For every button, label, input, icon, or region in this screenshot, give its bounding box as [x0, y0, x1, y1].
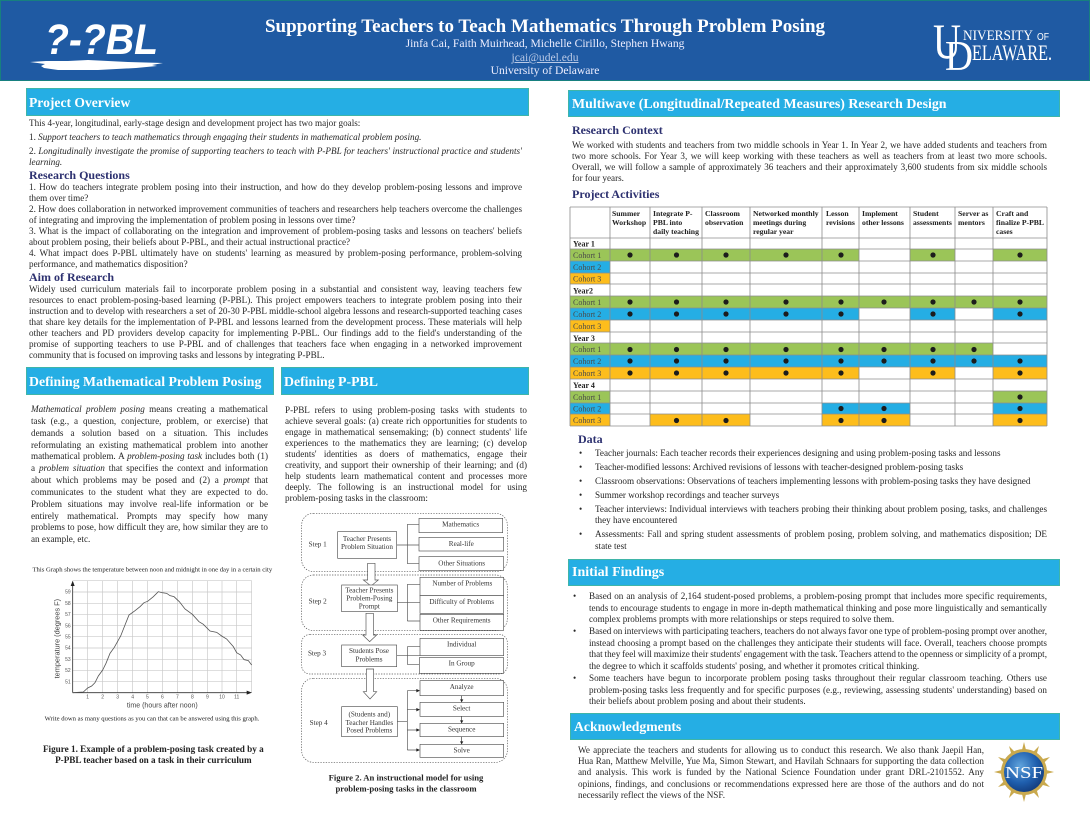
text: aim of research: Widely used curriculum materials fail to incorporate problem posing in a substantial and consistent way, leaving teachers few: [29, 284, 522, 294]
text: acknowledgments: necessarily reflect the views of the NSF.: [578, 790, 725, 800]
step 2: Problem-Posing: [346, 594, 393, 602]
text: definition of mathematical problem posing: task (e.g., a question, conjecture, problem, or exercise) that: [31, 416, 268, 426]
icon: NSF logo: [994, 742, 1054, 802]
line chart: 4: [131, 694, 134, 700]
row labels: Year 1: [573, 240, 595, 248]
panel heading: Defining Mathematical Problem Posing: [26, 367, 274, 395]
heading: Aim of Research: Aim of Research: [29, 270, 114, 284]
column headers: assessments: [913, 218, 952, 227]
list: data sources: •: [579, 448, 582, 458]
line chart: 6: [161, 694, 164, 700]
step 1: Mathematics: [442, 521, 479, 529]
figure 1 caption: P-PBL teacher based on a task in their curriculum: [55, 755, 252, 765]
step 2: Number of Problems: [432, 580, 493, 588]
list: data sources: •: [579, 490, 582, 500]
column headers: regular year: [753, 227, 794, 236]
text: definition of P-PBL: engage in mathematical sensemaking; (b) connect students' life: [285, 426, 527, 436]
list: initial findings: [573, 591, 1047, 706]
text: definition of P-PBL: [285, 404, 527, 503]
figure 2: instructional model flowchart: [301, 513, 508, 794]
row labels: Year 3: [573, 334, 595, 343]
line chart: 11: [234, 694, 239, 700]
row labels: Cohort 1: [573, 345, 601, 354]
table: project activities by year and cohort: [570, 206, 1048, 426]
column headers: revisions: [826, 218, 855, 227]
line chart: 55: [65, 634, 71, 640]
line chart: 56: [65, 623, 71, 629]
text: research context: Overall, we will follow a sample of approximately 36 teachers and their approximately 3,600 students from six middle schools: [572, 162, 1047, 172]
header band: [0, 0, 1090, 81]
text: acknowledgments: opinions, findings, and conclusions or recommendations expressed here are those of the authors and do not: [578, 779, 984, 789]
text: acknowledgments: and analysis. This work is funded by the National Science Foundation under grant DRL-2101552. Any: [578, 767, 984, 777]
step 2: Difficulty of Problems: [429, 598, 494, 606]
authors: Jinfa Cai, Faith Muirhead, Michelle Cirillo, Stephen Hwang: [406, 37, 684, 50]
text: research questions: 3. What is the impact of collaborating on the integration and improvement of problem-posing tasks and lessons on teachers' beliefs: [29, 226, 522, 236]
figure 2 caption: problem-posing tasks in the classroom: [335, 783, 477, 793]
column headers: [612, 209, 1044, 236]
text: definition of mathematical problem posing: communicates to the student what they are expected to do.: [31, 487, 268, 497]
step 3: Students Pose: [349, 647, 389, 655]
column headers: Craft and: [996, 209, 1029, 218]
list: data sources: Classroom observations: Observations of teachers implementing lessons with problem-posing tasks they have designed: [595, 476, 1030, 486]
list: data sources: Teacher interviews: Individual interviews with teachers probing their thinking about problem posing, tasks, and challenges: [595, 504, 1047, 514]
line chart: 59: [65, 590, 71, 596]
step 1: [309, 518, 504, 570]
text: definition of mathematical problem posing: an example, etc.: [31, 534, 90, 544]
text: research questions: performance, and mathematics disposition?: [29, 258, 188, 268]
panel heading: Defining Mathematical Problem Posing: Defining Mathematical Problem Posing: [29, 374, 261, 389]
graph instruction: Write down as many questions as you can that can be answered using this graph.: [45, 716, 260, 723]
step 4: Step 4: [310, 719, 328, 727]
text: definition of mathematical problem posing: entirely mathematical. Prompts may specify how many: [31, 511, 268, 521]
panel heading: Project Overview: Project Overview: [29, 95, 130, 110]
text: acknowledgments: We appreciate the teachers and students for allowing us to conduct this research. We also thank Jaepil Han,: [578, 745, 984, 755]
step 4: Analyze: [450, 683, 474, 691]
arrow: step 2 to step 3: [363, 613, 377, 642]
text: research context: [572, 140, 1047, 183]
list: data sources: they have encountered: [595, 514, 677, 524]
step 4: Posed Problems: [346, 727, 393, 735]
line chart: 57: [65, 612, 71, 618]
list: initial findings: •: [573, 591, 576, 601]
step 3: [308, 638, 504, 673]
row labels: [573, 240, 601, 425]
column headers: PBL into: [653, 218, 682, 227]
row labels: Cohort 3: [573, 274, 601, 284]
step 3: Individual: [447, 641, 476, 649]
column headers: Student: [913, 209, 939, 218]
text: definition of mathematical problem posing: problems to pose, how difficult they are, how similar they are to: [31, 522, 268, 532]
column headers: observation: [705, 218, 744, 227]
heading: Research Questions: Research Questions: [29, 168, 130, 182]
row labels: Cohort 2: [573, 404, 601, 414]
step 2: [309, 577, 504, 630]
step 1: Teacher Presents: [343, 535, 391, 543]
step 2: Step 2: [309, 597, 327, 605]
column headers: finalize P-PBL: [996, 218, 1044, 227]
graph prompt: This Graph shows the temperature between noon and midnight in one day in a certain city: [32, 567, 273, 574]
text: acknowledgments: [578, 745, 984, 800]
column headers: mentors: [958, 218, 985, 227]
text: aim of research: [29, 284, 522, 360]
list: initial findings: their beliefs about problem posing and about their students.: [589, 696, 806, 706]
row labels: Cohort 3: [573, 322, 601, 331]
heading: Project Activities: Project Activities: [572, 187, 659, 201]
line chart: 53: [65, 657, 71, 663]
figure 1 caption: [43, 744, 264, 765]
activity dots: [627, 252, 1023, 423]
list: data sources: Teacher-modified lessons: Archived revisions of lessons with teacher-designed problem-posing tasks: [595, 462, 963, 472]
text: research questions: them over time?: [29, 192, 88, 202]
step 2: Other Requirements: [433, 617, 491, 625]
text: research context: two more schools. For Year 3, we will keep working with these teachers as well as teachers from at least two more schools.: [572, 151, 1047, 161]
text: research context: We worked with students and teachers from two middle schools in Year 1. In Year 2, we have added students and teachers from: [572, 140, 1047, 150]
column headers: Server as: [958, 209, 988, 218]
step 4: Solve: [454, 747, 470, 755]
list: initial findings: tends to encourage students to engage in more in-depth mathematical thinking and pose more linguistically and semantically: [589, 602, 1047, 612]
text: definition of mathematical problem posing: demands a solution based on a situation. This includes: [31, 428, 268, 438]
line chart: 54: [65, 646, 71, 652]
text: definition of P-PBL: achieve several goals: (a) create rich opportunities for students to: [285, 416, 527, 426]
title: Supporting Teachers to Teach Mathematics Through Problem Posing: [265, 16, 825, 37]
row labels: Cohort 3: [573, 369, 601, 378]
text: research questions: 1. How do teachers integrate problem posing into their instruction, and how do they develop problem-posing lessons and improve: [29, 182, 522, 192]
table grid: [570, 207, 1047, 426]
figure 1: temperature graph task: [32, 567, 273, 765]
line chart: 58: [65, 601, 71, 607]
line chart: 9: [206, 694, 209, 700]
text: aim of research: resources to enact problem-posing-based learning (P-PBL). This project empowers teachers to integrate problem posing into their: [29, 295, 522, 305]
figure 2 caption: Figure 2. An instructional model for using: [329, 772, 484, 782]
row labels: Cohort 3: [573, 416, 601, 425]
text: definition of P-PBL: deeply. The following is an instructional model for using: [285, 482, 527, 492]
list: initial findings: •: [573, 673, 576, 683]
list: data sources: Summer workshop recordings and teacher surveys: [595, 490, 779, 500]
list: data sources: state test: [595, 540, 627, 550]
column headers: Classroom: [705, 209, 740, 218]
text: definition of P-PBL: P-PBL refers to using problem-posing tasks with students to: [285, 404, 527, 414]
text: definition of P-PBL: students' identities as doers of mathematics, engage their: [285, 448, 527, 458]
text: definition of mathematical problem posing: Mathematical problem posing means creating a mathematical: [31, 404, 268, 414]
line chart: [52, 581, 252, 710]
arrow: step 3 to step 4: [363, 669, 377, 699]
row labels: Cohort 2: [573, 310, 601, 319]
row labels: Cohort 1: [573, 298, 601, 307]
column headers: Summer: [612, 209, 641, 218]
list: data sources: •: [579, 462, 582, 472]
row labels: Year2: [573, 286, 593, 296]
text: definition of mathematical problem posing: reformulating an existing mathematical problem into another: [31, 440, 268, 450]
email: jcai@udel.edu: [511, 51, 578, 64]
text: definition of P-PBL: help students learn mathematical content and processes more: [285, 470, 527, 480]
figure 2 caption: [329, 772, 484, 793]
list: data sources: •: [579, 476, 582, 486]
colored cells: [570, 249, 1047, 426]
row labels: Year 4: [573, 381, 595, 390]
text: project overview goals: 1. Support teachers to teach mathematics through engaging their students in mathematical problem posing.: [29, 132, 421, 142]
list: initial findings: Based on interviews with participating teachers, teachers do not always favor one type of problem-posing prompt over another,: [589, 626, 1047, 636]
panel heading: Initial Findings: Initial Findings: [572, 565, 664, 580]
text: project overview goals: learning.: [29, 157, 62, 167]
list: initial findings: Some teachers have begun to incorporate problem posing tasks throughout their regular classroom teaching. Others use: [589, 673, 1047, 683]
row labels: Cohort 2: [573, 357, 601, 366]
row labels: Cohort 1: [573, 393, 601, 402]
text: aim of research: community that is focused on improving tasks and lessons by integrating P-PBL.: [29, 350, 325, 360]
list: initial findings: that they feel will maximize their students' engagement with the task. Teachers attend to the openness or simplicity of a prompt,: [589, 649, 1047, 659]
line chart: 52: [65, 668, 71, 674]
column headers: Implement: [862, 209, 898, 218]
column headers: Workshop: [612, 218, 646, 227]
column headers: Networked monthly: [753, 209, 819, 218]
step 2: Teacher Presents: [345, 586, 394, 594]
text: aim of research: instruction and to develop with researchers a set of 20-30 P-PBL middle-school algebra lessons and research-supported teaching cases: [29, 306, 522, 316]
panel heading: Defining P-PBL: Defining P-PBL: [284, 374, 378, 389]
list: initial findings: the degree to which it scaffolds students' posing, and whether it promotes critical thinking.: [589, 660, 919, 670]
panel heading: Multiwave Research Design: [568, 90, 1060, 117]
text: definition of P-PBL: creativity, and support their ownership of their learning; and (d): [285, 460, 527, 470]
line chart: 2: [101, 694, 104, 700]
column headers: Lesson: [826, 209, 849, 218]
logo: University of Delaware: [933, 20, 1052, 76]
column headers: Integrate P-: [653, 209, 693, 218]
logo: University of Delaware: OF: [1037, 31, 1049, 43]
step 4: Select: [453, 705, 470, 713]
step 2: Prompt: [359, 603, 380, 611]
text: aim of research: other teachers and PD providers develop capacity for implementing P-PBL. Our findings add to the field's understanding of the: [29, 328, 522, 338]
heading: Data: Data: [578, 432, 603, 446]
step 1: Other Situations: [438, 559, 485, 567]
heading: Research Context: Research Context: [572, 123, 663, 137]
text: research context: for four years.: [572, 173, 624, 183]
affiliation: University of Delaware: [491, 64, 599, 77]
list: data sources: •: [579, 528, 582, 538]
step 4: Sequence: [448, 726, 475, 734]
step 3: Step 3: [308, 650, 326, 658]
step 1: Real-life: [449, 540, 474, 548]
logo: University of Delaware: NIVERSITY: [963, 28, 1033, 44]
text: project overview goals: [29, 118, 522, 167]
column headers: other lessons: [862, 218, 904, 227]
list: data sources: •: [579, 504, 582, 514]
text: definition of mathematical problem posing: [30, 404, 268, 544]
row labels: Cohort 1: [573, 251, 601, 260]
list: initial findings: problem-posing tasks less frequently and for specific purposes (e.g., reviewing, assessing students' understanding) based on: [589, 684, 1047, 694]
column headers: daily teaching: [653, 227, 699, 236]
panel heading: Acknowledgments: Acknowledgments: [574, 719, 681, 734]
line chart: 1: [86, 694, 89, 700]
line chart: time (hours after noon): [127, 703, 198, 710]
text: definition of mathematical problem posing: mathematical problem. A problem-posing task includes both (1): [31, 451, 268, 461]
list: initial findings: Based on an analysis of 2,164 student-posed problems, a problem-posing prompt that includes more specific requirements,: [589, 591, 1047, 601]
step 3: Problems: [355, 656, 383, 664]
list: data sources: Teacher journals: Each teacher records their experiences designing and using problem-posing tasks and lessons: [595, 448, 1001, 458]
column headers: meetings during: [753, 218, 806, 227]
list: initial findings: •: [573, 626, 576, 636]
text: aim of research: promise of supporting teachers to use P-PBL and of challenges that teachers face when engaging in a networked improvement: [29, 339, 522, 349]
line chart: 7: [176, 694, 179, 700]
text: research questions: [29, 182, 522, 269]
step 4: Teacher Handles: [345, 719, 393, 727]
line chart: 3: [116, 694, 119, 700]
line chart: 51: [65, 679, 71, 685]
icon: NSF logo: NSF: [1005, 763, 1043, 782]
row labels: Cohort 2: [573, 263, 601, 272]
list: data sources: [579, 448, 1047, 550]
step 3: In Group: [449, 660, 475, 668]
panel heading: Defining P-PBL: [281, 367, 529, 395]
text: research questions: of integrating and improving the implementation of problem posing in lessons over time?: [29, 214, 355, 224]
step 1: Step 1: [309, 540, 327, 548]
text: definition of mathematical problem posing: about which problems may be posed and (2) a prompt that: [31, 475, 268, 485]
line chart: 10: [219, 694, 225, 700]
text: project overview goals: This 4-year, longitudinal, early-stage design and development project has two major goals:: [29, 118, 360, 128]
line chart: 8: [191, 694, 194, 700]
text: research questions: about problem posing, their beliefs about P-PBL, and their actual instructional practice?: [29, 236, 350, 246]
text: definition of P-PBL: experiences to the mathematics they are learning; (c) develop: [285, 438, 527, 448]
text: aim of research: that share key details for the implementation of P-PBL and lessons learned from the development process. These materials will help: [29, 317, 522, 327]
panel heading: Acknowledgments: [570, 713, 1060, 740]
list: data sources: Assessments: Fall and spring student assessments of problem posing, problem solving, and mathematics disposition; DE: [595, 528, 1047, 538]
list: initial findings: instead choosing a prompt based on the challenges they anticipate their students will face. Overall, teachers choose prompts: [589, 638, 1047, 648]
column headers: cases: [996, 227, 1013, 236]
text: research questions: 2. How does collaboration in networked improvement communities of teachers and researchers help teachers overcome the challenges: [29, 204, 522, 214]
step 4: (Students and): [349, 711, 391, 719]
text: research questions: 4. What impact does P-PBL ultimately have on students' learning as measured by problem-posing performance, problem-solving: [29, 248, 522, 258]
panel heading: Initial Findings: [568, 559, 1060, 586]
arrow: step 1 to step 2: [363, 563, 378, 586]
list: initial findings: complex problems prompts with more relationships or steps required to solve them.: [589, 614, 894, 624]
panel heading: Multiwave Research Design: Multiwave (Longitudinal/Repeated Measures) Research Design: [572, 97, 947, 112]
line chart: 5: [146, 694, 149, 700]
step 1: Problem Situation: [341, 543, 393, 551]
text: acknowledgments: Hua Ran, Matthew Melville, Yue Ma, Simon Stewart, and Havilah Schnaars for supporting the data collection: [578, 756, 984, 766]
panel heading: Project Overview: [26, 88, 529, 116]
text: definition of mathematical problem posing: a problem situation that specifies the context and information: [31, 463, 268, 473]
figure 1 caption: Figure 1. Example of a problem-posing task created by a: [43, 744, 264, 754]
text: definition of P-PBL: problem-posing tasks in the classroom:: [285, 492, 428, 502]
text: project overview goals: 2. Longitudinally investigate the promise of supporting teachers to teach with P-PBL for teachers' instructional practice and students': [29, 146, 522, 156]
text: definition of mathematical problem posing: Problem situations may involve real-life information or be: [31, 499, 268, 509]
step 4: [310, 681, 504, 757]
line chart: temperature (degrees F): [52, 599, 61, 678]
